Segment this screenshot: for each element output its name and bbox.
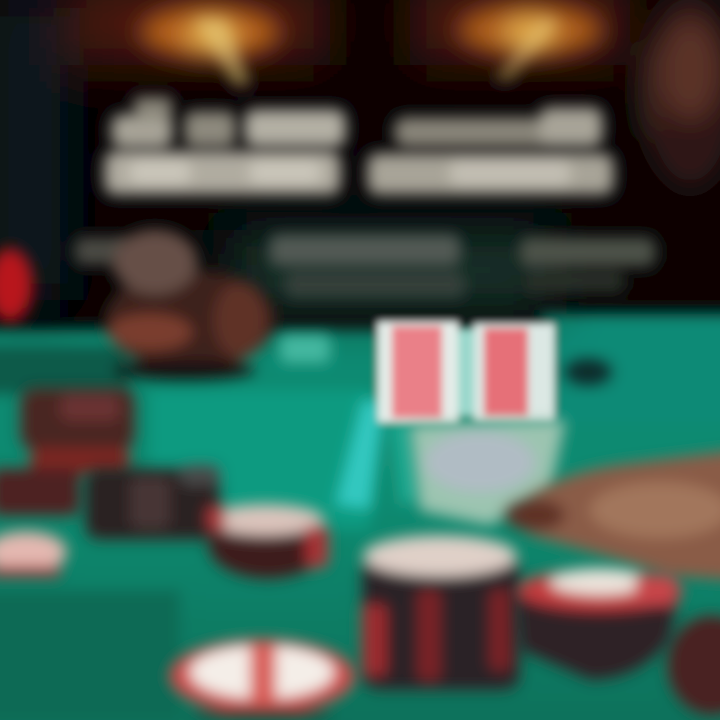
large chip stack front (362, 536, 520, 690)
orange lamp left (140, 6, 280, 58)
chip stack top left (0, 388, 135, 516)
chip on felt (170, 640, 354, 720)
small felt label (280, 335, 330, 363)
chip left edge (0, 532, 66, 576)
blurred title words (105, 98, 613, 194)
chip stack centre left (85, 465, 220, 540)
hand right (505, 450, 720, 580)
chip stack middle (205, 505, 328, 579)
background glow lights (0, 0, 630, 310)
hand bottom right corner (667, 615, 720, 715)
lamp beams (195, 20, 560, 85)
blurred subtitle words (75, 235, 655, 298)
orange lamp right (458, 4, 602, 56)
chip stack front right (515, 569, 682, 680)
cyan table line (335, 400, 420, 510)
hand top right (638, 0, 720, 190)
pale translucent card (410, 420, 565, 525)
playing cards (378, 322, 554, 422)
red object left edge (0, 249, 32, 321)
hand left (105, 230, 275, 380)
table felt (0, 314, 720, 720)
dark chip near cards (564, 358, 612, 386)
